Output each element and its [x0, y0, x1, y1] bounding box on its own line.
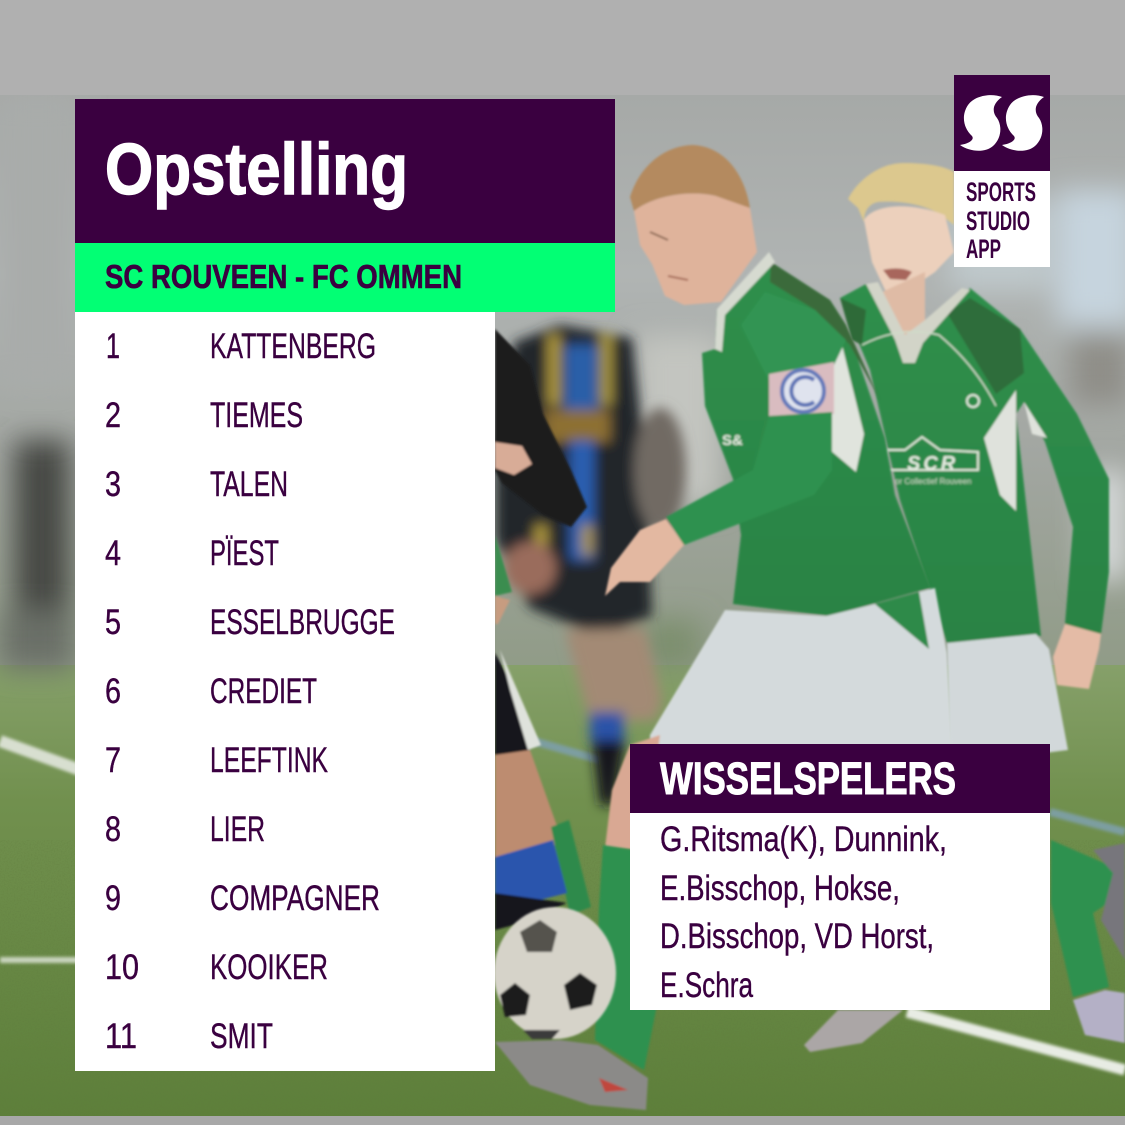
player list: COMPAGNER	[210, 879, 380, 918]
shirt	[702, 262, 931, 616]
upper sleeve	[743, 313, 846, 374]
main player's green sock and boot	[495, 845, 656, 1110]
match teams: SC ROUVEEN - FC OMMEN	[105, 258, 462, 295]
substitutes heading: WISSELSPELERS	[660, 753, 956, 804]
shorts	[947, 634, 1068, 765]
forearm sleeve	[666, 412, 832, 545]
player list: KOOIKER	[210, 948, 328, 987]
substitutes names: G.Ritsma(K), Dunnink,	[660, 820, 947, 859]
player list: 6	[105, 672, 121, 711]
logo wordmark	[966, 177, 1036, 264]
right leg, socks and boots	[804, 840, 1125, 1052]
face and neck	[864, 206, 954, 296]
panel: match name	[75, 243, 615, 312]
player list	[105, 327, 395, 1056]
title: Opstelling	[105, 130, 408, 210]
substitutes names: D.Bisschop, VD Horst,	[660, 917, 934, 956]
captain armband	[769, 362, 834, 420]
blurred background player in black, yellow and blue	[496, 325, 686, 805]
player list: LEEFTINK	[210, 741, 328, 780]
hair	[848, 163, 954, 225]
shirt sponsor: or Collectief Rouveen	[895, 477, 971, 486]
football	[494, 907, 616, 1039]
player list: 9	[105, 879, 121, 918]
shirt	[840, 284, 1109, 643]
hair	[629, 144, 751, 212]
player list: CREDIET	[210, 672, 317, 711]
face and neck	[634, 194, 757, 305]
shirt sponsor: SCR	[907, 453, 958, 475]
player list: 3	[105, 465, 121, 504]
icon: double S mark	[960, 95, 1044, 151]
player list: TIEMES	[210, 396, 303, 435]
player list: 4	[105, 534, 121, 573]
thigh	[605, 735, 660, 850]
dark player arm at left	[495, 329, 591, 930]
shirt sponsor	[886, 395, 979, 486]
logo wordmark: APP	[966, 234, 1001, 264]
substitutes names: E.Schra	[660, 966, 753, 1005]
pitch lines	[0, 740, 1125, 1070]
logo wordmark: STUDIO	[966, 206, 1030, 236]
player list: TALEN	[210, 465, 288, 504]
substitutes names: E.Bisschop, Hokse,	[660, 869, 900, 908]
main player with captain armband	[605, 145, 953, 850]
player list: 1	[106, 327, 120, 366]
player list: 11	[105, 1017, 137, 1056]
player list: SMIT	[210, 1017, 273, 1056]
top grey band	[0, 0, 1125, 95]
player list: LIER	[210, 810, 265, 849]
hand	[605, 519, 684, 596]
panel: starting eleven	[75, 312, 495, 1071]
player list: KATTENBERG	[210, 327, 376, 366]
second player with blond hair	[840, 163, 1109, 765]
hand	[1053, 624, 1101, 689]
logo wordmark: SPORTS	[966, 177, 1036, 207]
shorts	[650, 588, 953, 760]
substitutes names	[660, 820, 947, 1005]
player list: 5	[105, 603, 121, 642]
player list: PÏEST	[210, 534, 279, 573]
player list: 2	[105, 396, 121, 435]
player list: 10	[105, 948, 139, 987]
logo: Sports Studio App	[954, 75, 1050, 267]
player list: 8	[105, 810, 121, 849]
panel: substitutes	[630, 744, 1050, 1010]
shirt text: S&	[722, 432, 743, 449]
player list: ESSELBRUGGE	[210, 603, 395, 642]
panel: title header	[75, 99, 615, 243]
player list: 7	[105, 741, 121, 780]
bottom grey band	[0, 1116, 1125, 1125]
